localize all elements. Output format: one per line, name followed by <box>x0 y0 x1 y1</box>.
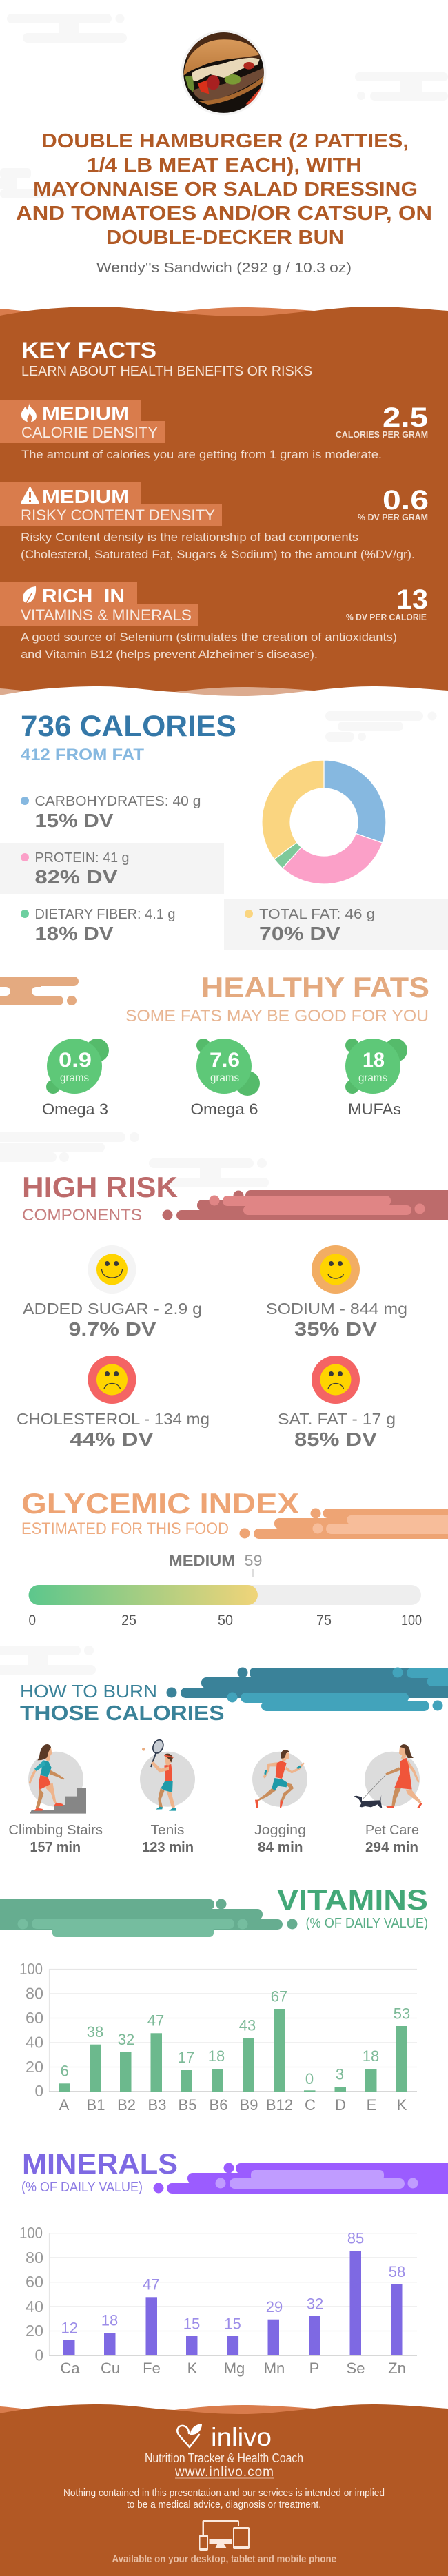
chart: minerals bar chart: 85 <box>347 2230 364 2247</box>
fact: calorie density <box>0 400 428 461</box>
subheading: glycemic index: ESTIMATED FOR THIS FOOD <box>21 1520 229 1538</box>
activity: jogging <box>252 1750 307 1855</box>
panel: key facts <box>0 307 448 704</box>
fact: calorie density: The amount of calories you are getting from 1 gram is moderate. <box>21 448 382 461</box>
heading: high risk: HIGH RISK <box>22 1171 178 1203</box>
title <box>16 130 432 249</box>
chart: minerals bar chart: 40 <box>26 2298 43 2316</box>
chart: vitamins bar chart: 100 <box>19 1960 43 1978</box>
risk: cholesterol: CHOLESTEROL - 134 mg <box>17 1410 210 1428</box>
chart: minerals bar chart: Fe <box>143 2360 161 2377</box>
chart: vitamins bar chart: 3 <box>336 2066 344 2083</box>
chart: macronutrient donut <box>262 760 386 884</box>
chart: minerals bar chart: 18 <box>101 2311 118 2329</box>
chart: minerals bar chart: 12 <box>61 2320 78 2337</box>
chart: vitamins bar chart: 38 <box>87 2023 103 2041</box>
heading: key facts: KEY FACTS <box>21 338 156 362</box>
decorative band: glycemic index <box>240 1508 448 1539</box>
decorative cloud: title left <box>0 168 69 198</box>
subheading: components: COMPONENTS <box>22 1206 142 1225</box>
chart: vitamins bar chart: E <box>367 2096 376 2114</box>
fact: risky content density: % DV PER GRAM <box>358 512 428 522</box>
fact: risky content density: RISKY CONTENT DENSITY <box>21 507 215 524</box>
gauge: glycemic index value: 59 <box>244 1552 262 1569</box>
fact: calorie density: CALORIES PER GRAM <box>336 429 428 440</box>
gauge: glycemic index value: 0 <box>29 1613 36 1628</box>
fact: calorie density: MEDIUM <box>42 402 129 424</box>
chart: minerals bar chart <box>19 2224 417 2377</box>
decorative band: vitamins <box>0 1899 298 1937</box>
disclaimer: Nothing contained in this presentation and our services is intended or implied <box>63 2487 385 2499</box>
icon: warning triangle <box>22 488 39 503</box>
icon: flame <box>21 403 37 422</box>
risk: cholesterol <box>17 1356 210 1450</box>
gauge: glycemic index value: MEDIUM <box>169 1552 235 1569</box>
risk: cholesterol: 44% DV <box>70 1429 154 1450</box>
decorative band: high risk <box>163 1190 448 1220</box>
legend: total fat <box>224 899 448 950</box>
gauge: glycemic index value: 75 <box>316 1613 332 1628</box>
stat: MUFAs: 18 <box>363 1049 385 1072</box>
fact: rich in vitamins and minerals: VITAMINS & MINERALS <box>21 606 192 624</box>
risk: saturated fat <box>278 1356 396 1450</box>
risk: sodium: SODIUM - 844 mg <box>266 1300 407 1318</box>
activity: tennis <box>140 1738 195 1855</box>
fact: risky content density: MEDIUM <box>42 486 129 507</box>
stat: omega 3: 0.9 <box>59 1049 92 1072</box>
fact: risky content density: 0.6 <box>383 485 429 515</box>
activity: pet care <box>354 1744 422 1855</box>
activity: climbing stairs <box>8 1744 103 1855</box>
title: MAYONNAISE OR SALAD DRESSING <box>33 178 418 201</box>
legend: protein: PROTEIN: 41 g <box>34 850 130 866</box>
tagline: Nutrition Tracker & Health Coach <box>145 2451 303 2465</box>
risk: sodium <box>266 1245 407 1340</box>
heading: calories: 736 CALORIES <box>21 710 236 743</box>
chart: vitamins bar chart: B6 <box>210 2096 227 2114</box>
fact: risky content density: Risky Content density is the relationship of bad components <box>21 531 358 544</box>
fact: rich in vitamins and minerals: RICH IN <box>42 585 125 606</box>
chart: minerals bar chart: 80 <box>26 2249 43 2267</box>
chart: minerals bar chart: 60 <box>26 2273 43 2291</box>
logo: inlivo <box>177 2423 272 2451</box>
decorative band: burn calories <box>167 1668 448 1711</box>
activity: tennis: 123 min <box>142 1840 194 1855</box>
legend: total fat: 70% DV <box>259 923 340 944</box>
chart: minerals bar chart: 29 <box>266 2298 283 2316</box>
risk: sodium: 35% DV <box>294 1318 377 1340</box>
chart: minerals bar chart: Cu <box>101 2360 120 2377</box>
risk: saturated fat: SAT. FAT - 17 g <box>278 1410 396 1428</box>
chart: vitamins bar chart: B3 <box>148 2096 166 2114</box>
activity: climbing stairs: Climbing Stairs <box>8 1823 103 1838</box>
chart: vitamins bar chart: 80 <box>26 1985 43 2003</box>
heading: healthy fats: HEALTHY FATS <box>201 971 429 1003</box>
title: DOUBLE HAMBURGER (2 PATTIES, <box>41 130 409 152</box>
chart: vitamins bar chart: B12 <box>266 2096 293 2114</box>
decorative cloud: calories <box>325 711 437 742</box>
title: 1/4 LB MEAT EACH), WITH <box>87 154 362 176</box>
heading: vitamins: VITAMINS <box>277 1883 428 1916</box>
gauge: glycemic index value: 25 <box>121 1613 136 1628</box>
decorative band: minerals <box>153 2163 448 2194</box>
chart: minerals bar chart: Ca <box>61 2360 80 2377</box>
fact: rich in vitamins and minerals: A good source of Selenium (stimulates the creation of antioxidants) <box>21 631 397 644</box>
availability note: Available on your desktop, tablet and mobile phone <box>112 2553 336 2565</box>
chart: minerals bar chart: P <box>309 2360 319 2377</box>
chart: vitamins bar chart: 40 <box>26 2034 43 2052</box>
chart: minerals bar chart: Se <box>347 2360 365 2377</box>
chart: vitamins bar chart: 0 <box>34 2082 43 2100</box>
legend: protein: 82% DV <box>34 866 118 888</box>
gauge: glycemic index value: 50 <box>218 1613 233 1628</box>
chart: vitamins bar chart: B5 <box>179 2096 196 2114</box>
fact: risky content density <box>0 482 429 561</box>
chart: vitamins bar chart: A <box>59 2096 70 2114</box>
chart: minerals bar chart: 20 <box>26 2322 43 2340</box>
chart: minerals bar chart: 32 <box>307 2295 323 2312</box>
chart: vitamins bar chart: 18 <box>208 2047 225 2065</box>
chart: vitamins bar chart: 53 <box>394 2005 410 2022</box>
chart: minerals bar chart: Mn <box>264 2360 285 2377</box>
risk: added sugar: ADDED SUGAR - 2.9 g <box>23 1300 202 1318</box>
decorative cloud: burn calories <box>0 1646 96 1675</box>
chart: vitamins bar chart: D <box>335 2096 346 2114</box>
title: DOUBLE-DECKER BUN <box>106 227 344 249</box>
legend: dietary fiber: 18% DV <box>34 923 114 944</box>
stat: omega 6: 7.6 <box>210 1049 240 1072</box>
heading: those calories: THOSE CALORIES <box>20 1701 225 1725</box>
stat: omega 6: Omega 6 <box>190 1101 258 1118</box>
subheading: vitamins: (% OF DAILY VALUE) <box>306 1916 428 1931</box>
risk: added sugar: 9.7% DV <box>69 1318 156 1340</box>
gauge: glycemic index value <box>29 1552 422 1628</box>
food photo: hamburger <box>181 30 266 116</box>
stat: MUFAs <box>345 1039 407 1118</box>
legend: carbohydrates: CARBOHYDRATES: 40 g <box>34 794 201 809</box>
chart: vitamins bar chart: 20 <box>26 2058 43 2076</box>
chart: minerals bar chart: 47 <box>143 2276 160 2293</box>
icon: leaf <box>23 586 36 603</box>
chart: vitamins bar chart: 6 <box>61 2063 69 2080</box>
stat: omega 6 <box>190 1039 260 1118</box>
chart: minerals bar chart: Mg <box>224 2360 245 2377</box>
risk: added sugar <box>23 1245 202 1340</box>
fact: rich in vitamins and minerals <box>0 582 428 661</box>
disclaimer <box>63 2487 385 2511</box>
legend: total fat: TOTAL FAT: 46 g <box>259 907 375 922</box>
activity: pet care: 294 min <box>365 1840 418 1855</box>
legend: carbohydrates: 15% DV <box>34 810 114 831</box>
stat: omega 3: Omega 3 <box>42 1101 108 1118</box>
chart: vitamins bar chart: 60 <box>26 2009 43 2027</box>
chart: minerals bar chart: 100 <box>19 2224 43 2242</box>
legend: protein <box>0 843 224 894</box>
subheading: key facts: LEARN ABOUT HEALTH BENEFITS OR RISKS <box>21 364 312 379</box>
legend: dietary fiber: DIETARY FIBER: 4.1 g <box>34 907 175 922</box>
subtitle: serving size: Wendy''s Sandwich (292 g / 10.3 oz) <box>96 260 352 276</box>
gauge: glycemic index value: 100 <box>401 1613 422 1628</box>
chart: minerals bar chart: 15 <box>183 2315 200 2332</box>
decorative cloud: above high risk left <box>0 1132 139 1162</box>
chart: vitamins bar chart: C <box>305 2096 316 2114</box>
fact: rich in vitamins and minerals: % DV PER CALORIE <box>346 612 427 622</box>
legend: carbohydrates <box>21 794 201 831</box>
disclaimer: to be a medical advice, diagnosis or treatment. <box>127 2499 321 2511</box>
footer panel <box>0 2404 448 2576</box>
chart: vitamins bar chart: 18 <box>363 2047 379 2065</box>
fact: rich in vitamins and minerals: 13 <box>396 584 428 615</box>
fact: risky content density: (Cholesterol, Saturated Fat, Sugars & Sodium) to the amount (%DV/gr). <box>21 548 415 561</box>
stat: MUFAs: MUFAs <box>348 1101 401 1118</box>
stat: omega 3: grams <box>60 1072 89 1084</box>
chart: vitamins bar chart: 17 <box>178 2049 194 2066</box>
legend: dietary fiber <box>21 907 175 944</box>
heading: how to burn: HOW TO BURN <box>20 1681 157 1701</box>
activity: tennis: Tenis <box>150 1823 185 1838</box>
chart: vitamins bar chart: 0 <box>305 2070 314 2087</box>
activity: pet care: Pet Care <box>365 1823 419 1838</box>
stat: MUFAs: grams <box>358 1072 387 1084</box>
stat: omega 3 <box>42 1039 109 1118</box>
chart: vitamins bar chart: 43 <box>239 2017 256 2034</box>
chart: minerals bar chart: 58 <box>389 2263 405 2280</box>
decorative cloud: top right <box>355 72 448 101</box>
heading: minerals: MINERALS <box>22 2147 178 2180</box>
decorative cloud: above high risk right <box>149 1158 269 1187</box>
chart: minerals bar chart: 15 <box>224 2315 241 2332</box>
chart: vitamins bar chart: B1 <box>87 2096 105 2114</box>
stat: omega 6: grams <box>210 1072 239 1084</box>
chart: minerals bar chart: K <box>187 2360 198 2377</box>
chart: vitamins bar chart <box>19 1960 417 2114</box>
fact: calorie density: CALORIE DENSITY <box>21 424 158 441</box>
risk: saturated fat: 85% DV <box>294 1429 377 1450</box>
chart: vitamins bar chart: K <box>397 2096 407 2114</box>
icon: devices <box>199 2520 250 2551</box>
fact: calorie density: 2.5 <box>383 402 428 433</box>
decorative band: healthy fats <box>0 977 79 1005</box>
activity: jogging: 84 min <box>258 1840 303 1855</box>
chart: vitamins bar chart: B2 <box>117 2096 136 2114</box>
subheading: calories from fat: 412 FROM FAT <box>21 746 144 764</box>
chart: minerals bar chart: 0 <box>34 2347 43 2364</box>
activity: jogging: Jogging <box>254 1823 306 1838</box>
fact: rich in vitamins and minerals: and Vitamin B12 (helps prevent Alzheimer’s disease). <box>21 648 318 661</box>
chart: vitamins bar chart: 32 <box>118 2031 134 2048</box>
website link: www.inlivo.com <box>174 2465 274 2480</box>
chart: vitamins bar chart: B9 <box>240 2096 258 2114</box>
logo: inlivo: inlivo <box>211 2423 272 2451</box>
subheading: healthy fats: SOME FATS MAY BE GOOD FOR YOU <box>125 1007 429 1025</box>
title: AND TOMATOES AND/OR CATSUP, ON <box>16 203 432 225</box>
chart: vitamins bar chart: 67 <box>271 1987 287 2005</box>
heading: glycemic index: GLYCEMIC INDEX <box>21 1487 299 1520</box>
chart: minerals bar chart: Zn <box>388 2360 406 2377</box>
activity: climbing stairs: 157 min <box>30 1840 81 1855</box>
decorative cloud: top left <box>7 14 127 43</box>
chart: vitamins bar chart: 47 <box>147 2012 164 2030</box>
subheading: minerals: (% OF DAILY VALUE) <box>21 2180 143 2195</box>
